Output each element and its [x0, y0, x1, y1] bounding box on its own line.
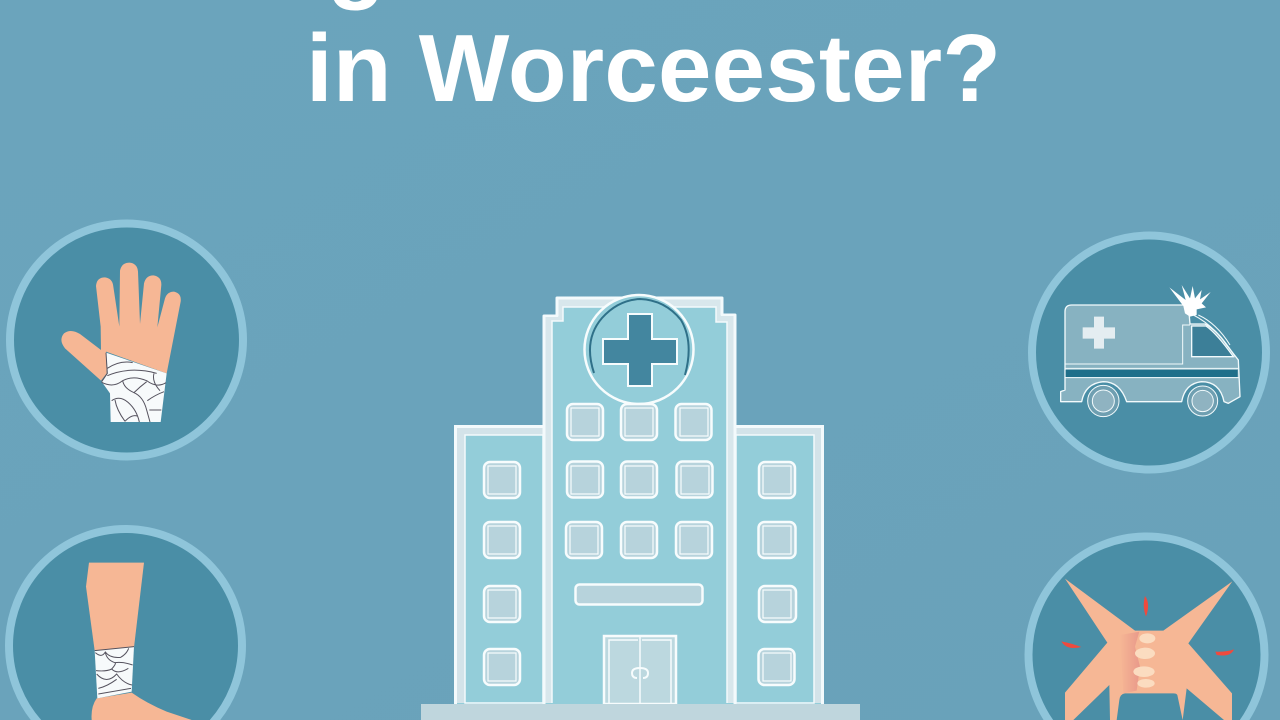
building base	[421, 704, 860, 720]
central tower	[544, 298, 735, 706]
icon: bandaged ankle in circle	[9, 529, 242, 720]
windows	[484, 404, 796, 685]
entrance doors	[604, 636, 676, 704]
window inner frames	[488, 408, 791, 681]
icon: ambulance in circle	[1032, 236, 1266, 470]
icon: hospital building	[421, 295, 860, 720]
icon: clenched hands with pain marks in circle	[1028, 536, 1264, 720]
sign bar	[576, 584, 702, 604]
right wing	[732, 426, 822, 706]
title: in Worceester?	[306, 15, 1001, 122]
icon: bandaged hand in circle	[10, 224, 243, 456]
left wing	[456, 426, 548, 706]
hospital emblem with cross	[584, 295, 694, 404]
